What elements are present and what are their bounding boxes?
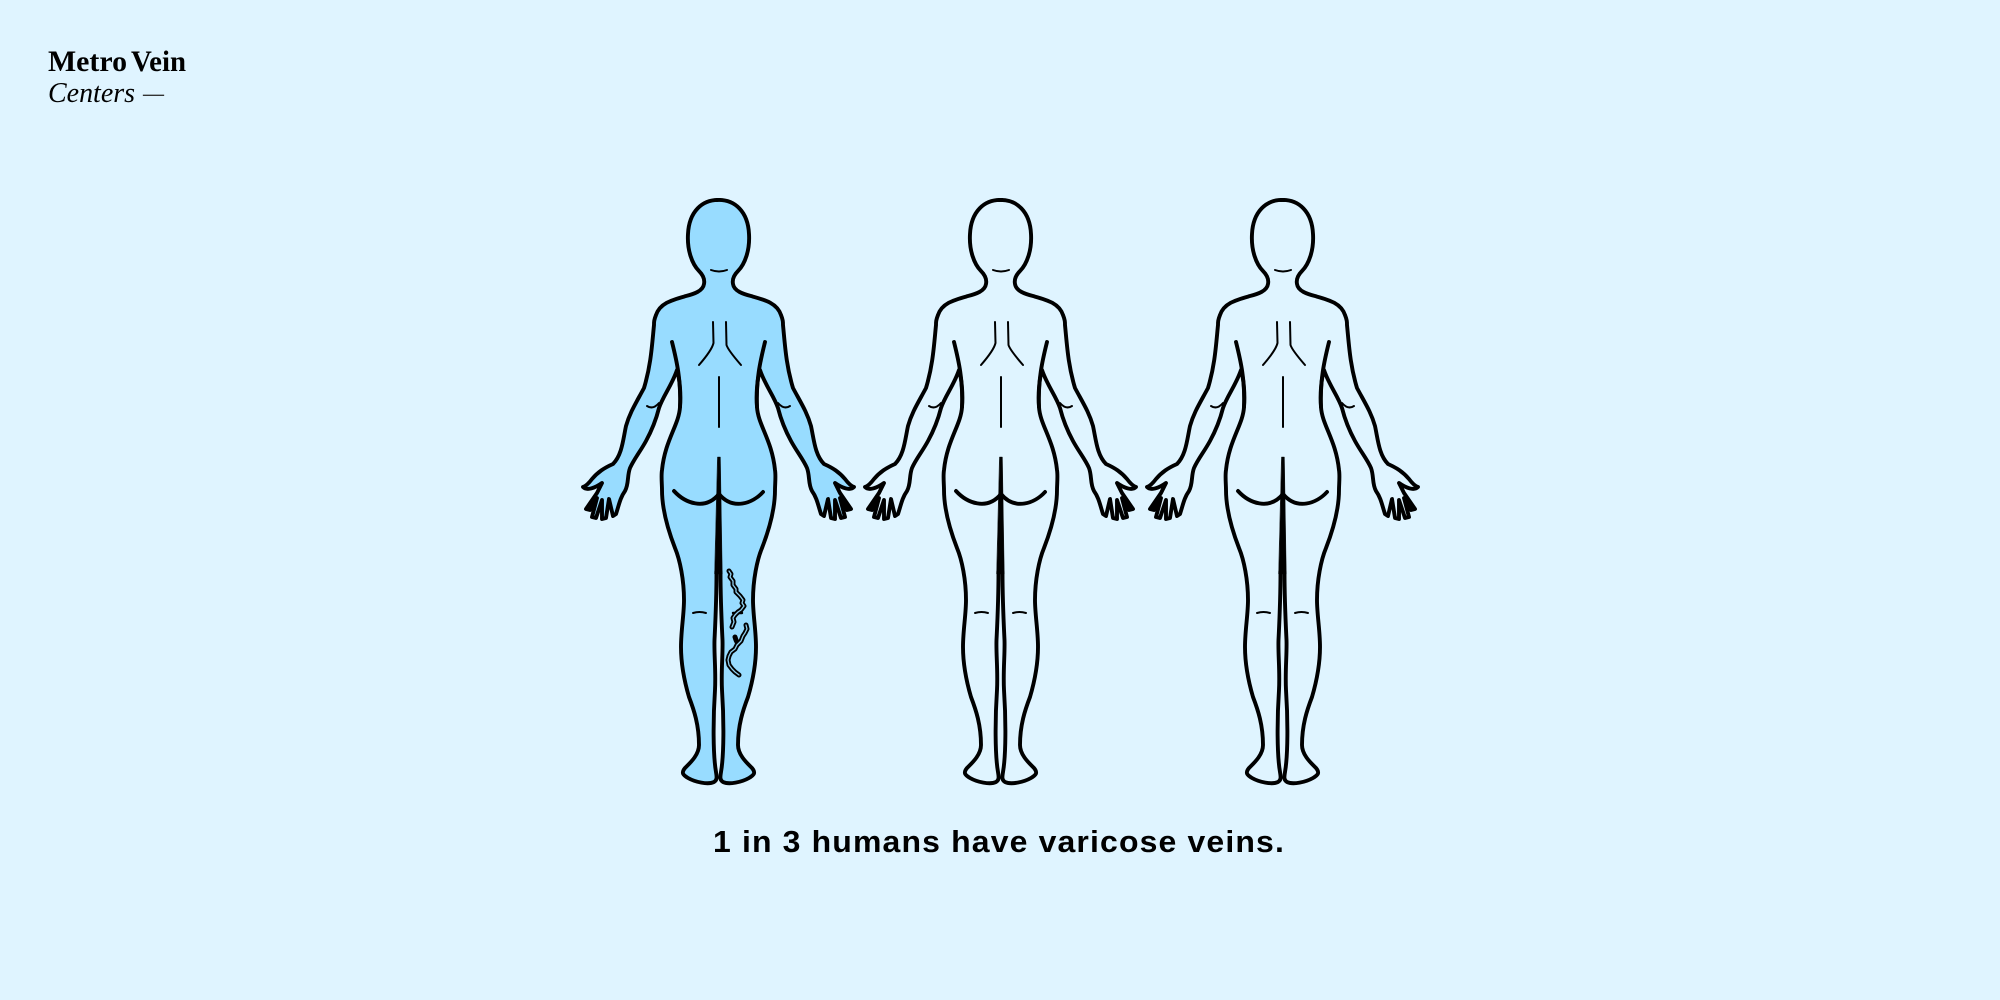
logo: Metro Vein Centers: Vein (131, 46, 186, 78)
varicose veins on right leg (728, 571, 747, 675)
logo: Metro Vein Centers: Centers (48, 78, 135, 109)
logo: Metro Vein Centers: Metro (48, 46, 127, 78)
figure 3: outlined human (1147, 200, 1418, 783)
caption: 1 in 3 humans have varicose veins. (713, 824, 1285, 859)
figure 2: outlined human (865, 200, 1136, 783)
logo: Metro Vein Centers: — (142, 78, 165, 109)
logo: Metro Vein Centers (48, 46, 186, 109)
figure 1: highlighted human with varicose veins (583, 200, 854, 783)
